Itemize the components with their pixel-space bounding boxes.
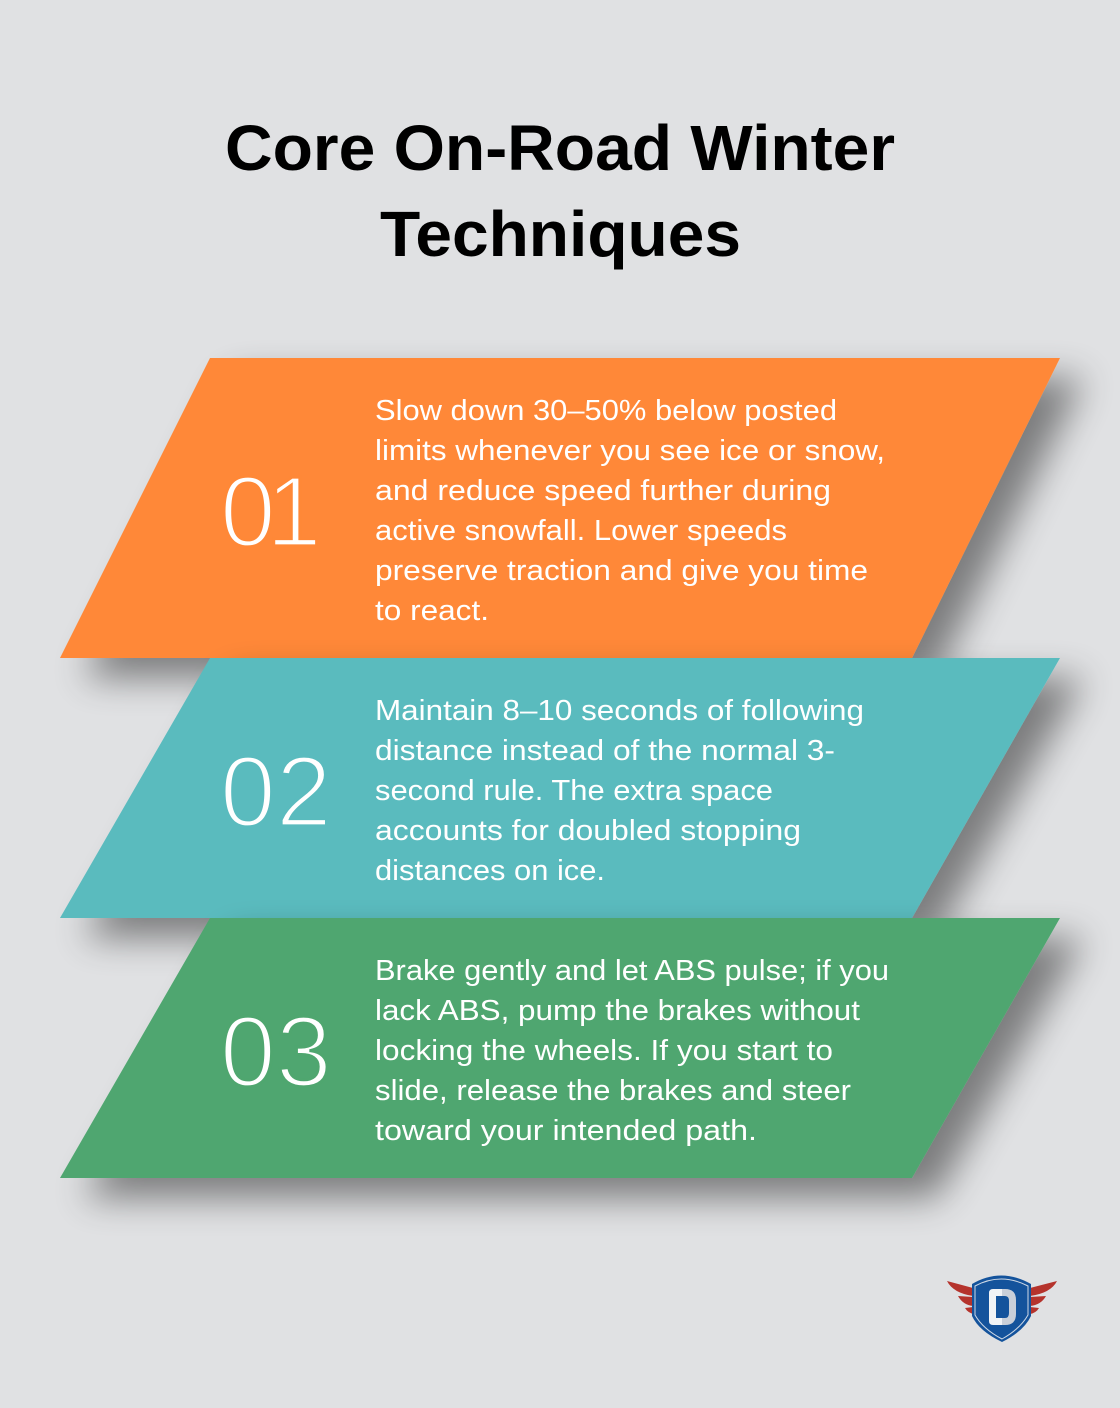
parallelogram: teal	[60, 658, 1060, 918]
number 02: 02	[220, 736, 332, 848]
text block: step 01: preserve traction and give you time	[375, 555, 868, 587]
title: Techniques	[380, 198, 741, 270]
text block: step 03: slide, release the brakes and steer	[375, 1075, 851, 1107]
title: Core On-Road Winter	[225, 112, 895, 184]
panel: step 02 teal	[60, 658, 1060, 918]
text block: step 02: second rule. The extra space	[375, 775, 773, 807]
text block: step 03	[375, 955, 889, 1147]
panel: step 03 green	[60, 918, 1060, 1178]
text block: step 01: active snowfall. Lower speeds	[375, 515, 787, 547]
text block: step 03: locking the wheels. If you start to	[375, 1035, 833, 1067]
text block: step 03: Brake gently and let ABS pulse; if you	[375, 955, 889, 987]
text block: step 02: distance instead of the normal 3-	[375, 735, 835, 767]
title	[225, 112, 895, 270]
text block: step 01: to react.	[375, 595, 489, 627]
panel: step 01 orange	[60, 358, 1060, 658]
text block: step 02	[375, 695, 864, 887]
text block: step 01	[375, 395, 885, 627]
number 01: 01	[220, 456, 322, 568]
text block: step 02: accounts for doubled stopping	[375, 815, 801, 847]
text block: step 02: distances on ice.	[375, 855, 605, 887]
text block: step 01: limits whenever you see ice or snow,	[375, 435, 885, 467]
parallelogram: orange	[60, 358, 1060, 658]
text block: step 03: toward your intended path.	[375, 1115, 757, 1147]
number 03: 03	[220, 996, 332, 1108]
text block: step 01: Slow down 30–50% below posted	[375, 395, 837, 427]
text block: step 03: lack ABS, pump the brakes without	[375, 995, 860, 1027]
text block: step 01: and reduce speed further during	[375, 475, 831, 507]
text block: step 02: Maintain 8–10 seconds of following	[375, 695, 864, 727]
icon: shield logo with wings	[947, 1276, 1057, 1342]
parallelogram: green	[60, 918, 1060, 1178]
